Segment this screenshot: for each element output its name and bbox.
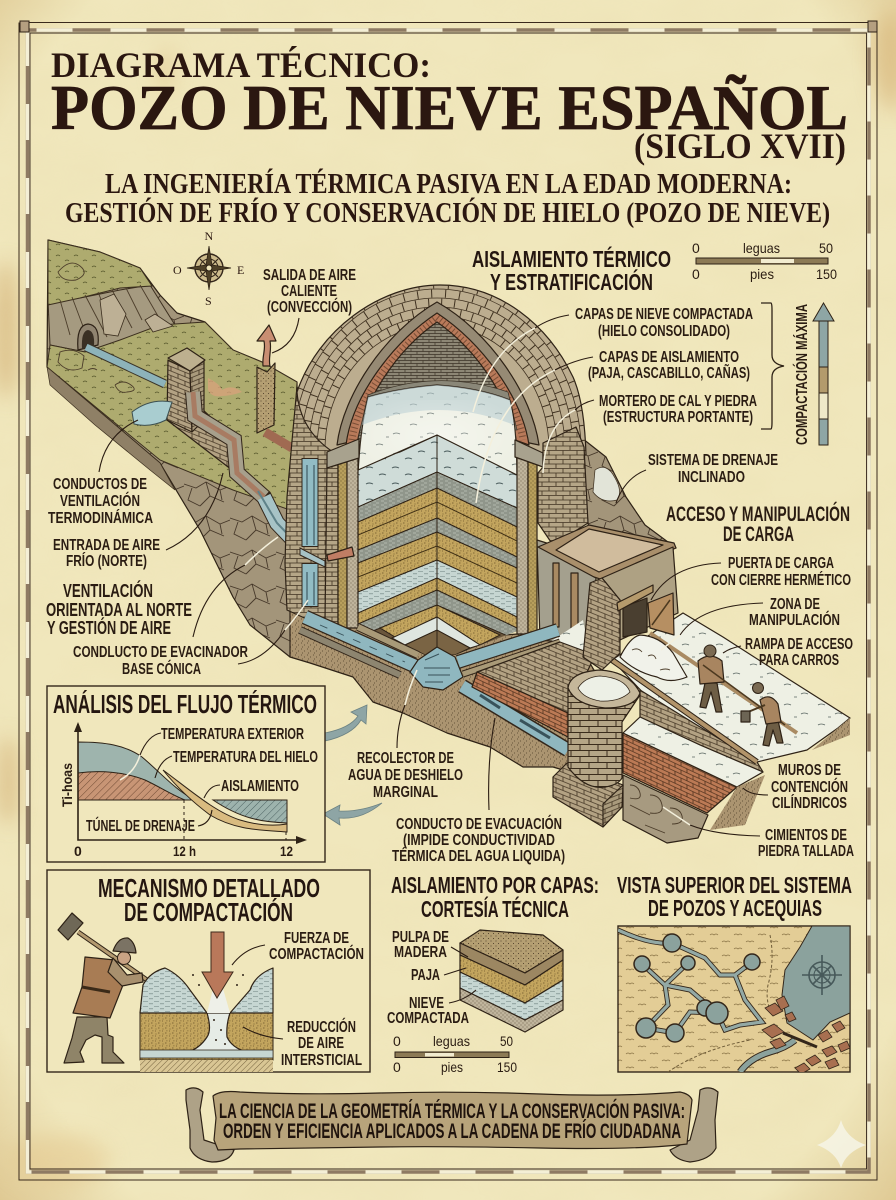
left pillar with cap: [325, 439, 359, 630]
support wall and posts: [537, 540, 596, 667]
label: reducción de aire intersticial: INTERSTICIAL: [281, 1052, 362, 1069]
label: capas de aislamiento: (PAJA, CASCABILLO, CAÑAS): [588, 362, 750, 382]
water body: [782, 926, 850, 1040]
river and paths: [740, 1040, 795, 1072]
heading: ventilación orientada al norte: Y GESTIÓN DE AIRE: [47, 617, 171, 638]
label: conductos de ventilación termodinámica: CONDUCTOS DE: [53, 476, 147, 493]
label: salida de aire caliente: CALIENTE: [281, 283, 337, 300]
worker 1: [698, 645, 785, 725]
dome: [285, 280, 589, 632]
label: conducto de evacuación: TÉRMICA DEL AGUA LIQUIDA): [392, 846, 565, 865]
label: nieve compactada: [387, 990, 476, 1027]
heading: acceso y manipulación: [666, 502, 850, 546]
thermal flow chart: 12 h: [173, 843, 196, 859]
rock and snow behind the dome: [578, 435, 676, 548]
label: conducto de evacuación: [392, 814, 565, 865]
red brick wall by channel: [472, 642, 595, 737]
panel heading: ANÁLISIS DEL FLUJO TÉRMICO: [53, 689, 317, 719]
label: nieve compactada: NIEVE: [409, 995, 444, 1012]
scale bar: small: 150: [497, 1059, 517, 1075]
right curved tower: [538, 427, 588, 545]
label: recolector de agua: AGUA DE DESHIELO: [348, 767, 463, 784]
label: recolector de agua: MARGINAL: [373, 784, 438, 801]
label: entrada de aire frío: FRÍO (NORTE): [66, 551, 147, 570]
thermal flow chart: Ti-hoas: [59, 763, 75, 807]
cylindrical pillar and base: [553, 670, 640, 827]
scroll left end: [186, 1088, 234, 1162]
label: entrada de aire frío: [53, 537, 160, 570]
banner scroll: [186, 1088, 718, 1162]
label: puerta de carga: [711, 555, 851, 589]
scale bar: small: [393, 1033, 517, 1075]
label: rampa de acceso: [745, 636, 853, 669]
scroll body: [213, 1092, 692, 1150]
terrain and cliff: [47, 240, 300, 657]
scale bar: small: 50: [500, 1033, 513, 1049]
compass rose: S: [205, 294, 212, 308]
heading: ventilación orientada al norte: VENTILACIÓN: [63, 580, 153, 601]
drainage channels and meltwater collector: [300, 617, 568, 750]
scroll right end: [670, 1088, 718, 1162]
label: conducto de evacinador: CONDLUCTO DE EVACINADOR: [73, 644, 248, 661]
label: muros de contención: MUROS DE: [778, 762, 841, 779]
heading: [391, 872, 599, 922]
label: sistema de drenaje: SISTEMA DE DRENAJE: [648, 452, 778, 469]
label: puerta de carga: PUERTA DE CARGA: [728, 555, 834, 572]
scale bar: small: 0: [393, 1059, 401, 1075]
town: [783, 1033, 817, 1047]
heading: [617, 872, 852, 921]
label: cimientos de piedra tallada: CIMIENTOS DE: [765, 827, 847, 844]
label: pulpa de madera: MADERA: [394, 944, 447, 961]
panel: vista superior: [617, 872, 852, 1074]
panel: aislamiento por capas: [387, 872, 599, 1075]
label: mortero de cal y piedra: MORTERO DE CAL Y PIEDRA: [599, 393, 757, 410]
stratified layers in pit: [355, 430, 520, 660]
thermal flow chart: [59, 722, 318, 859]
title: diagrama técnico: DIAGRAMA TÉCNICO:: [51, 45, 431, 85]
label: zona de manipulación: [749, 596, 840, 629]
label: recolector de agua: [348, 750, 463, 801]
right pillar with cap: [515, 440, 543, 634]
hot air outlet chimney with convection arrow: [257, 325, 292, 448]
label: entrada de aire frío: ENTRADA DE AIRE: [53, 537, 160, 554]
label: mortero de cal y piedra: (ESTRUCTURA PORTANTE): [603, 409, 753, 426]
lower wall with snow and foundations: [623, 717, 765, 843]
label: zona de manipulación: MANIPULACIÓN: [749, 610, 840, 629]
label: salida de aire caliente: [263, 267, 356, 316]
title: siglo XVII: (SIGLO XVII): [634, 126, 846, 166]
heading: CORTESÍA TÉCNICA: [421, 895, 569, 922]
label: fuerza de compactación: [232, 930, 364, 965]
thermal flow chart: 12: [280, 843, 293, 859]
panel heading: MECANISMO DETALLADO: [98, 873, 320, 903]
heading: aislamiento térmico: AISLAMIENTO TÉRMICO: [472, 245, 671, 272]
label: salida de aire caliente: (CONVECCIÓN): [267, 297, 352, 316]
label: muros de contención: CONTENCIÓN: [771, 777, 848, 796]
thermal flow chart: 0: [74, 843, 82, 859]
panel heading: [98, 873, 320, 927]
figure: man with hammer: [58, 913, 147, 1063]
label: compactación máxima: COMPACTACIÓN MÁXIMA: [792, 304, 811, 445]
map compass: [802, 955, 842, 995]
sparkle watermark: [817, 1120, 866, 1168]
label: conducto de evacuación: (IMPIDE CONDUCTIVIDAD: [403, 832, 555, 849]
label: reducción de aire intersticial: REDUCCIÓN: [287, 1017, 356, 1036]
worker 2: [741, 682, 783, 746]
panel: análisis del flujo térmico: [47, 686, 325, 862]
compass rose: N: [204, 229, 214, 243]
heading: ventilación orientada al norte: [46, 580, 192, 638]
label: conductos de ventilación termodinámica: [48, 476, 153, 527]
label: pulpa de madera: PULPA DE: [392, 929, 449, 946]
thermal flow chart: AISLAMIENTO: [221, 778, 299, 795]
label: capas de aislamiento: CAPAS DE AISLAMIENTO: [599, 349, 739, 366]
heading: ventilación orientada al norte: ORIENTADA AL NORTE: [46, 599, 192, 620]
compass rose: O: [173, 263, 182, 277]
label: pulpa de madera: [392, 929, 468, 961]
main cutaway illustration: [47, 229, 850, 843]
workers on the ramp: [698, 645, 785, 746]
layer block: [460, 930, 563, 1032]
label: sistema de drenaje: INCLINADO: [678, 469, 745, 486]
scale bar: leguas and pies: 0: [692, 266, 700, 282]
scale bar: small: leguas: [433, 1033, 470, 1049]
subtitle: [65, 167, 830, 229]
heading: acceso y manipulación: DE CARGA: [723, 523, 794, 546]
label: capas de nieve compactada: (HIELO CONSOLIDADO): [598, 323, 730, 340]
compaction cross-section: [140, 968, 273, 1072]
label: conducto de evacinador: [73, 644, 248, 678]
heading: aislamiento térmico: Y ESTRATIFICACIÓN: [490, 268, 653, 295]
label: salida de aire caliente: SALIDA DE AIRE: [263, 267, 356, 284]
label: cimientos de piedra tallada: [758, 827, 854, 860]
arrow: flow back to panel: [323, 803, 382, 825]
label: capas de nieve compactada: [575, 306, 753, 340]
heading: aislamiento térmico: [472, 245, 671, 295]
thermal flow chart: TÚNEL DE DRENAJE: [86, 816, 195, 835]
access building with door: [538, 525, 678, 670]
panel heading: DE COMPACTACIÓN: [124, 897, 293, 927]
channels: [618, 930, 762, 1033]
label: muros de contención: CILÍNDRICOS: [772, 793, 847, 812]
compass rose: [173, 229, 244, 308]
label: muros de contención: [771, 762, 848, 812]
title block: [51, 45, 848, 229]
interior back wall: [357, 322, 517, 445]
heading: AISLAMIENTO POR CAPAS:: [391, 872, 599, 898]
label: capas de aislamiento: [588, 349, 750, 382]
vertical water duct and red spout: [300, 458, 354, 607]
upper snow mass: [358, 385, 517, 480]
tunnel and stream: [78, 324, 165, 384]
banner text: [219, 1099, 685, 1143]
label: fuerza de compactación: COMPACTACIÓN: [269, 944, 364, 963]
label: conducto de evacinador: BASE CÓNICA: [122, 659, 201, 678]
arrow: compaction force: [202, 932, 233, 998]
scale bar: leguas and pies: pies: [750, 266, 774, 282]
map: [618, 926, 850, 1074]
label: fuerza de compactación: FUERZA DE: [284, 930, 349, 947]
title: pozo de nieve español: POZO DE NIEVE ESPAÑOL: [51, 72, 848, 143]
ventilation ducts: [193, 392, 326, 560]
label: nieve compactada: COMPACTADA: [387, 1010, 469, 1027]
leader lines: [99, 315, 768, 836]
label: recolector de agua: RECOLECTOR DE: [357, 750, 454, 767]
label: capas de nieve compactada: CAPAS DE NIEVE COMPACTADA: [575, 306, 753, 323]
label: zona de manipulación: ZONA DE: [770, 596, 820, 613]
label: paja: PAJA: [411, 967, 440, 984]
scale bar: leguas and pies: 0: [692, 240, 700, 256]
label: reducción de aire intersticial: [243, 1017, 362, 1069]
arrow: compaction scale: [813, 303, 834, 445]
well circles: [634, 934, 760, 1042]
scale bar: leguas and pies: leguas: [743, 240, 780, 256]
cold air intake tower: [132, 348, 242, 470]
arch frame: [337, 302, 539, 445]
snow ramp surface: [612, 613, 850, 772]
panel: mecanismo de compactación: [47, 870, 370, 1072]
foundation earth beneath the pit: [290, 610, 600, 772]
thermal flow chart: TEMPERATURA DEL HIELO: [173, 749, 318, 766]
label: conductos de ventilación termodinámica: VENTILACIÓN: [60, 491, 140, 510]
arrow: flow up to collector: [325, 705, 367, 741]
scale bar: small: pies: [441, 1059, 463, 1075]
scale bar: small: 0: [393, 1033, 401, 1049]
label: rampa de acceso: PARA CARROS: [759, 652, 839, 669]
label: reducción de aire intersticial: DE AIRE: [298, 1035, 344, 1052]
label: conducto de evacuación: CONDUCTO DE EVACUACIÓN: [396, 814, 562, 833]
scale bar: leguas and pies: 150: [816, 266, 837, 282]
compass rose: E: [237, 263, 244, 277]
label: cimientos de piedra tallada: PIEDRA TALLADA: [758, 843, 854, 860]
scale bar: leguas and pies: [692, 240, 837, 282]
scale bar: leguas and pies: 50: [819, 240, 833, 256]
thermal flow chart: TEMPERATURA EXTERIOR: [161, 726, 304, 743]
label: sistema de drenaje: [648, 452, 778, 486]
brace: [761, 303, 784, 429]
label: mortero de cal y piedra: [599, 393, 757, 426]
label: conductos de ventilación termodinámica: TERMODINÁMICA: [48, 508, 153, 527]
